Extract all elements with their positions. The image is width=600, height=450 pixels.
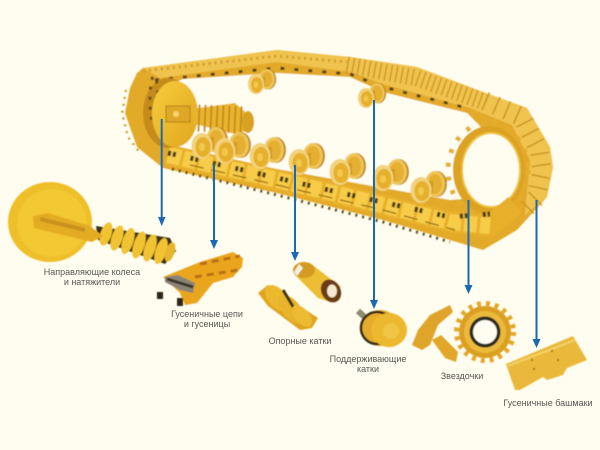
- label: sprocket: Звездочки: [441, 371, 483, 381]
- upper run lit surface: [143, 50, 553, 215]
- part: track chain: [157, 252, 243, 306]
- arrow: sprockets: [464, 200, 472, 294]
- label: idler: и натяжители: [64, 277, 120, 287]
- arrows: [158, 100, 540, 348]
- main illustration: undercarriage track: [122, 50, 553, 250]
- track chain holes, upper run: [155, 68, 467, 108]
- track rollers: [192, 127, 447, 203]
- lower track links: [168, 153, 515, 242]
- shoe ribs on the upper run: [122, 56, 542, 212]
- part: track shoe: [506, 336, 587, 390]
- label: carrier roller: [330, 354, 406, 374]
- roller A: [258, 281, 318, 330]
- label: carrier roller: Поддерживающие: [330, 354, 406, 364]
- label: idler: Направляющие колеса: [44, 267, 140, 277]
- arrow: idler: [158, 119, 166, 226]
- label: track chain: Гусеничные цепи: [171, 309, 243, 319]
- arrow: track shoes: [532, 200, 540, 348]
- idler wheel: [143, 76, 198, 148]
- roller B: [293, 262, 345, 306]
- part: track rollers: [258, 262, 345, 330]
- label: carrier roller: катки: [357, 364, 379, 374]
- label: track chain: и гусеницы: [184, 319, 230, 329]
- track inner opening: [150, 73, 516, 200]
- track belt: [125, 50, 553, 250]
- arrow: track rollers: [291, 165, 299, 261]
- top carrier rollers: [248, 69, 386, 108]
- part: sprocket: [412, 304, 514, 362]
- label: track chain: [171, 309, 243, 329]
- part: carrier roller: [358, 310, 407, 347]
- tensioner spring: [166, 103, 254, 134]
- label: idler: [44, 267, 140, 287]
- tensioner spring part: [96, 221, 177, 266]
- sprocket ring: [448, 123, 528, 217]
- arrow: carrier rollers: [370, 100, 378, 309]
- arrow: track chain: [210, 164, 218, 249]
- sprocket segments: [412, 305, 458, 362]
- label: track rollers: Опорные катки: [269, 336, 331, 346]
- part: idler and tensioner: [8, 182, 177, 266]
- label: track shoe: Гусеничные башмаки: [503, 398, 593, 408]
